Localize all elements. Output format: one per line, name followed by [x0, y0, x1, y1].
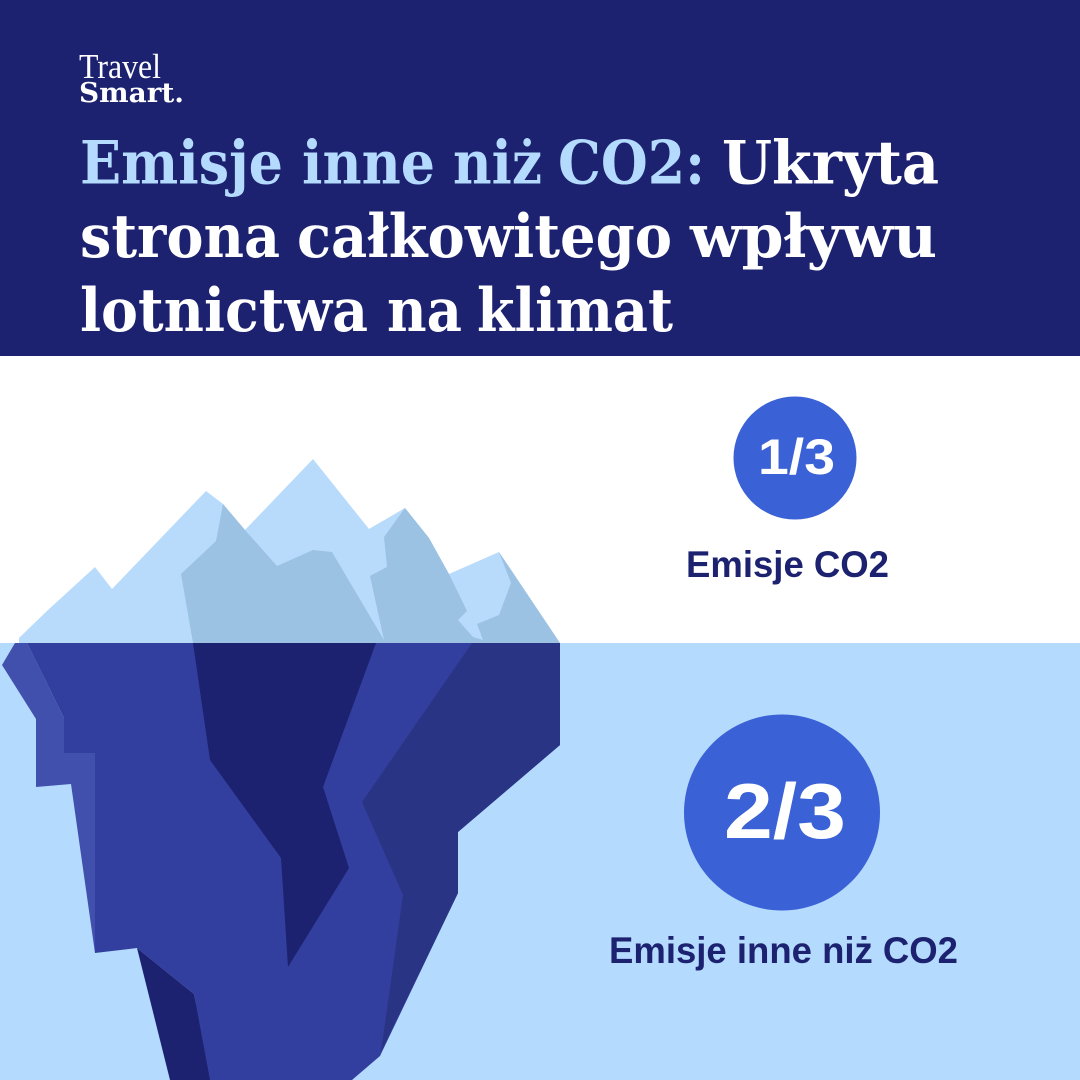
- title: niż: [453, 128, 542, 198]
- label: Emisje CO2: Emisje CO2: [686, 544, 889, 585]
- logo: Travel Smart: Travel: [79, 47, 161, 86]
- iceberg: above water: [19, 459, 560, 643]
- stat: 1/3 CO2 emissions: [686, 396, 889, 585]
- logo: Travel Smart: Smart.: [79, 78, 184, 109]
- stat: 2/3 non-CO2 emissions: [609, 714, 958, 971]
- title: klimat: [477, 276, 673, 346]
- circle badge 1/3: 1/3: [758, 429, 835, 485]
- circle badge 1/3: [734, 396, 856, 520]
- circle badge 2/3: [684, 714, 880, 910]
- title: Emisje: [80, 128, 283, 198]
- label: Emisje inne niż CO2: Emisje inne niż CO2: [609, 930, 958, 971]
- header panel: [0, 0, 1080, 356]
- title: [80, 128, 939, 346]
- title: wpływu: [689, 202, 937, 272]
- circle badge 2/3: 2/3: [724, 767, 846, 855]
- title: strona: [80, 202, 280, 272]
- title: inne: [302, 128, 435, 198]
- title: na: [387, 276, 462, 346]
- iceberg illustration: [2, 459, 560, 1080]
- title: lotnictwa: [80, 276, 368, 346]
- title: całkowitego: [297, 202, 672, 272]
- title: CO2:: [558, 128, 705, 198]
- logo: Travel Smart: [79, 47, 184, 109]
- iceberg: below water: [2, 643, 560, 1080]
- water background: [0, 643, 1080, 1080]
- title: Ukryta: [722, 128, 939, 198]
